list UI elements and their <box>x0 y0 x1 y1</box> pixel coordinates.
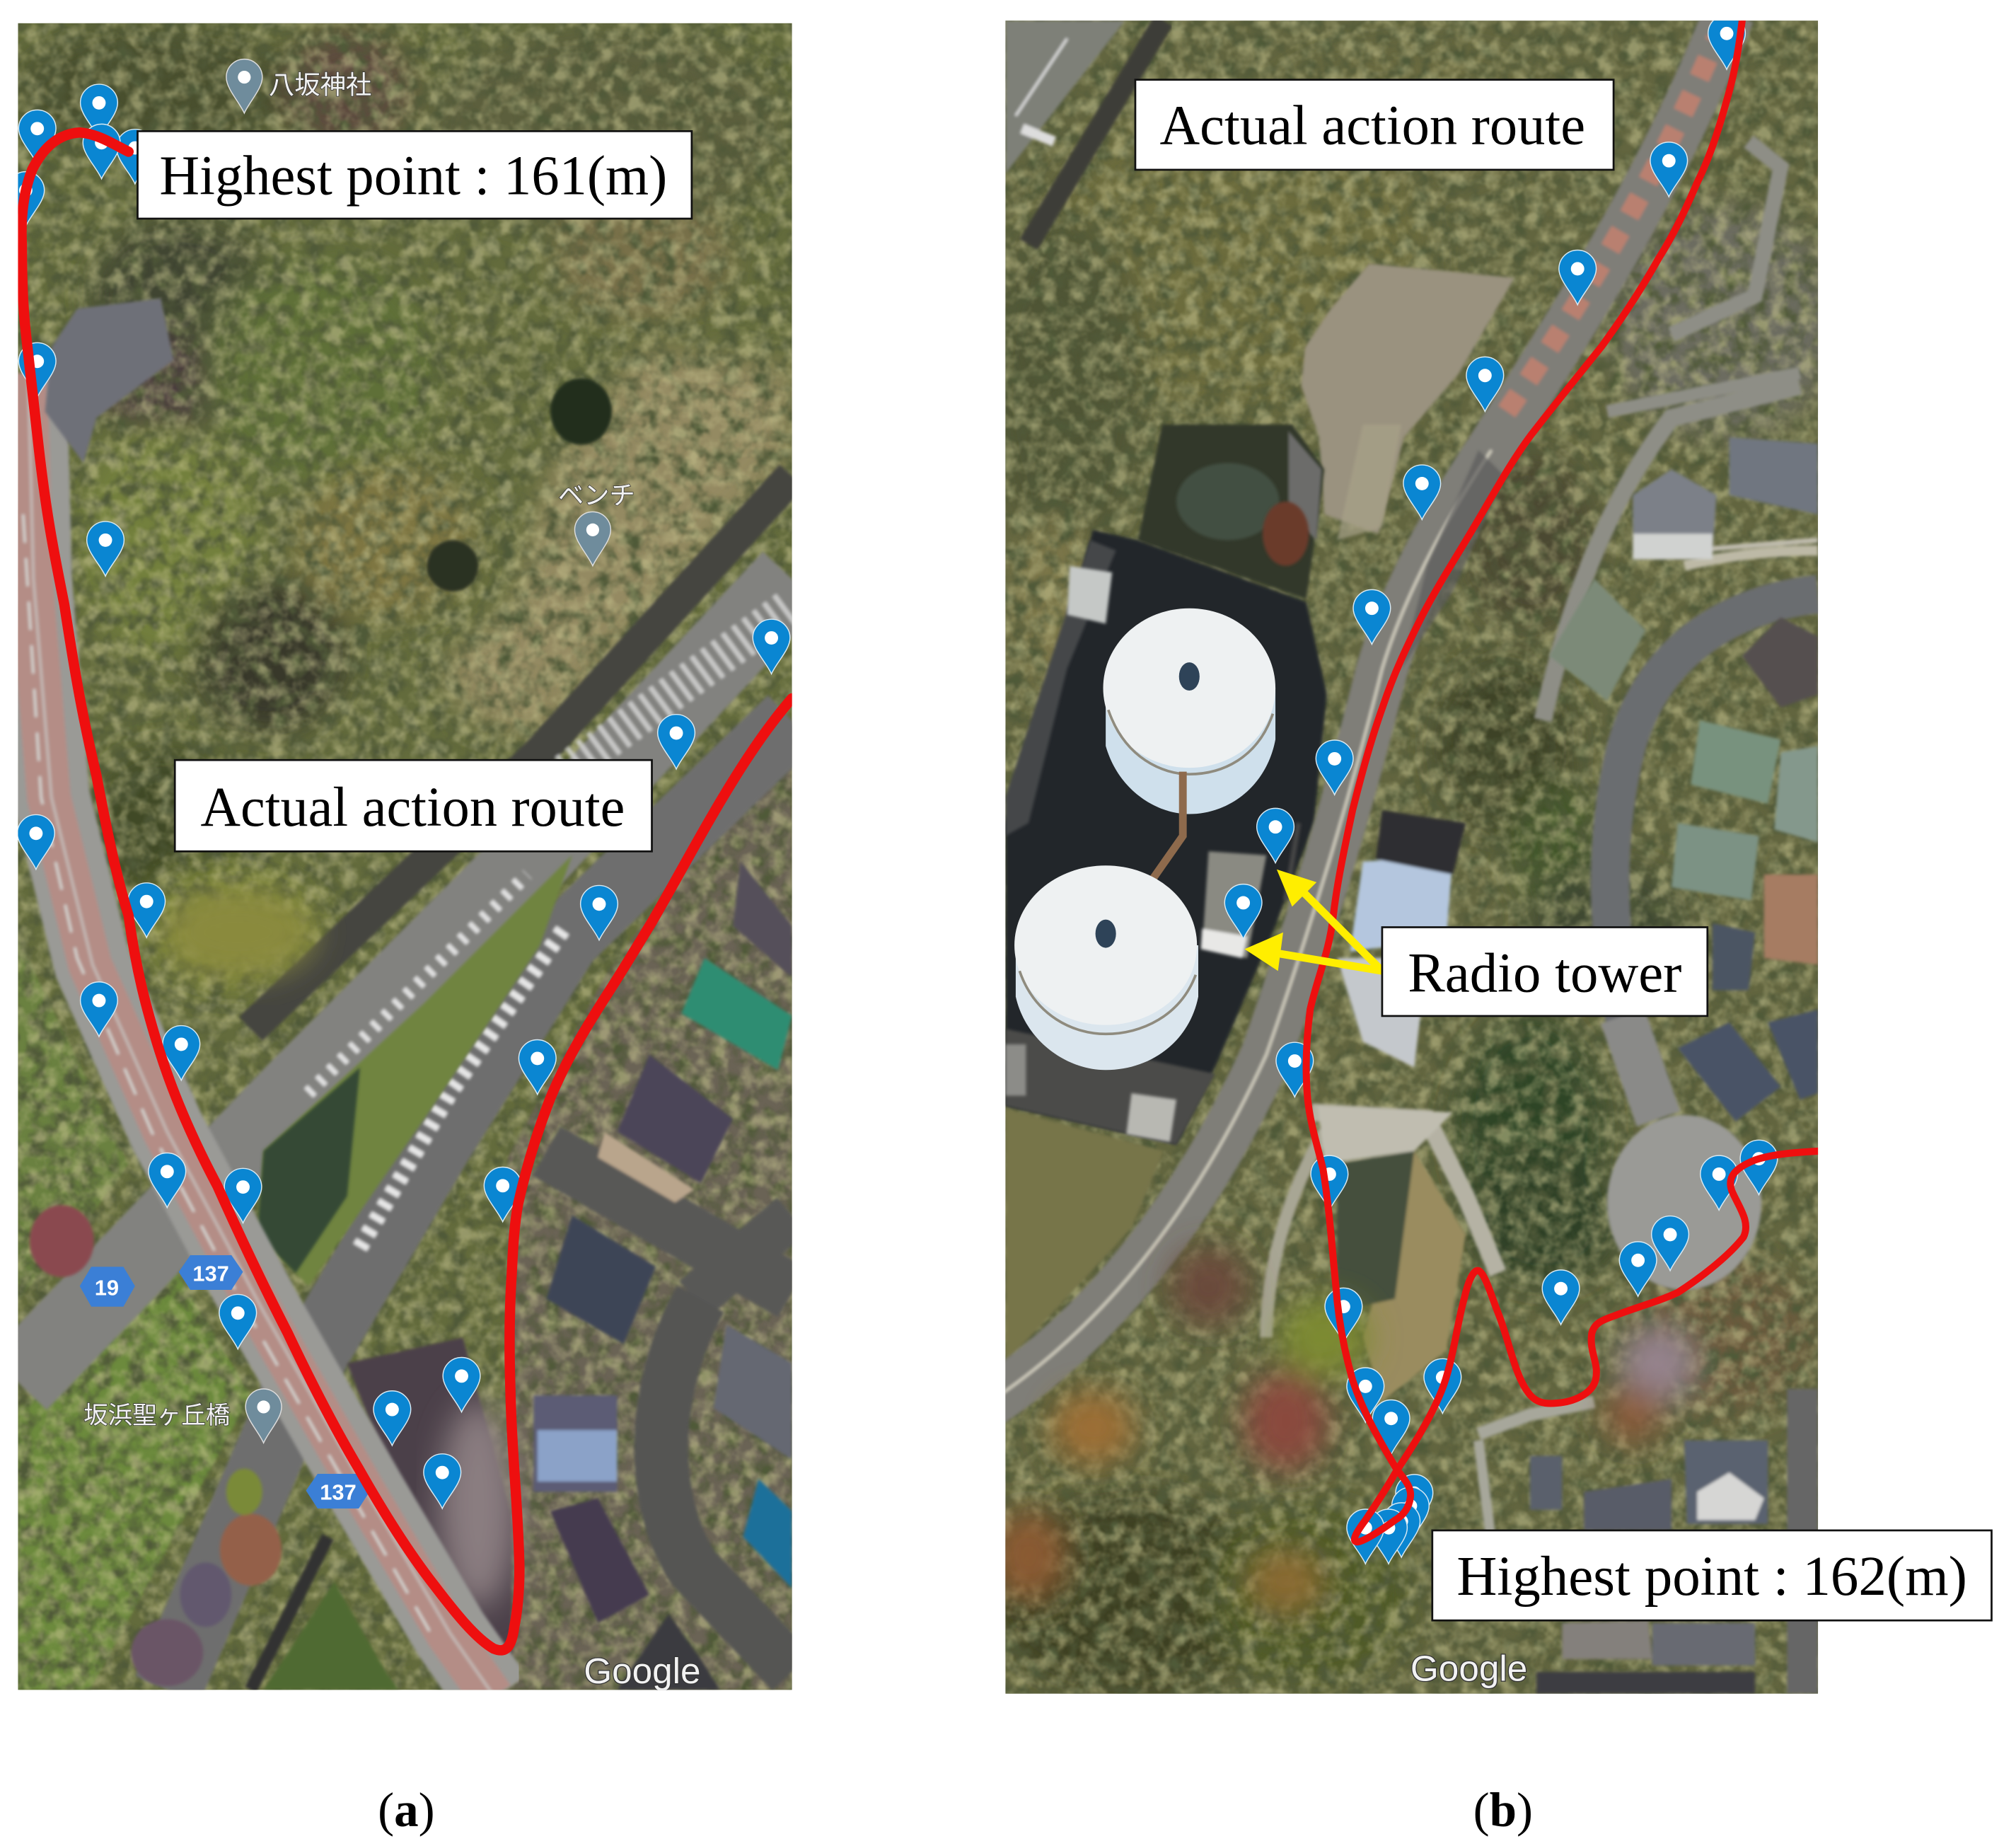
arrow: to lower radio tower <box>1244 933 1382 971</box>
label: highest point 162 m <box>1432 1530 1991 1620</box>
map label: shrine pin: 八坂神社 <box>269 71 371 100</box>
route shield 137 <box>179 1255 243 1290</box>
label: actual action route a <box>175 760 652 851</box>
elevated bridge <box>23 373 495 1697</box>
map label: bench pin <box>558 481 635 566</box>
tank yard shadow <box>1138 425 1324 599</box>
houses a <box>533 862 792 1690</box>
gray building at bridge top <box>45 299 173 463</box>
pipe between tanks <box>1147 772 1183 887</box>
route shield 137 lower: 137 <box>320 1479 357 1504</box>
label: actual action route b <box>1135 80 1614 170</box>
small buildings at yard <box>1005 566 1266 1142</box>
panel: map a <box>7 23 792 1697</box>
label: radio tower: Radio tower <box>1408 942 1681 1004</box>
map label: bench pin: ベンチ <box>558 481 635 510</box>
cul-de-sac <box>1607 1115 1761 1290</box>
satellite imagery a <box>7 23 792 1697</box>
gravel lot <box>1301 264 1514 533</box>
label: actual action route b: Actual action route <box>1159 95 1585 157</box>
actual route line a <box>21 132 792 1650</box>
residential pavement and curved road <box>1543 142 1818 1119</box>
caption (a): (a) <box>378 1782 435 1837</box>
satellite imagery b <box>990 13 1838 1697</box>
caption (b): (b) <box>1473 1782 1533 1837</box>
location pins a <box>7 84 790 1508</box>
label: highest point 161 m: Highest point : 161(m) <box>159 144 667 207</box>
tank yard pad <box>1005 530 1327 1145</box>
trees and dark wedge under the bridge <box>30 1205 511 1690</box>
storage tank upper <box>1103 608 1275 814</box>
arrow: to upper radio tower <box>1277 870 1382 971</box>
label: highest point 161 m <box>137 131 692 219</box>
Google logo a: Google <box>584 1651 701 1691</box>
label: radio tower <box>1382 927 1708 1016</box>
green median <box>257 855 572 1286</box>
houses b <box>1337 437 1818 1694</box>
grass lot <box>1005 1109 1164 1363</box>
route shield 19 <box>80 1267 135 1307</box>
park paths and lawn <box>1266 1106 1594 1595</box>
route shield 137 lower <box>306 1474 370 1508</box>
label: highest point 162 m: Highest point : 162(m) <box>1456 1545 1967 1608</box>
location pins b <box>1224 15 1778 1564</box>
lower-right residential ground <box>508 720 792 1690</box>
main road b <box>990 13 1730 1402</box>
Google logo b: Google <box>1410 1649 1527 1689</box>
lower-left green field <box>18 1267 250 1690</box>
roads a <box>18 476 792 1690</box>
map label: bridge pin: 坂浜聖ヶ丘橋 <box>83 1402 230 1429</box>
route shield 19: 19 <box>95 1275 119 1300</box>
storage tank lower <box>1014 865 1198 1070</box>
upper-left road <box>1005 21 1164 244</box>
map label: bridge pin <box>83 1389 282 1443</box>
actual route line b <box>1307 21 1821 1542</box>
panel: map b <box>990 13 1991 1697</box>
label: actual action route a: Actual action route <box>201 776 625 838</box>
autumn trees <box>990 1247 1697 1614</box>
route shield 137: 137 <box>192 1261 229 1286</box>
tan grass field <box>437 347 792 739</box>
map label: shrine pin <box>226 59 371 113</box>
